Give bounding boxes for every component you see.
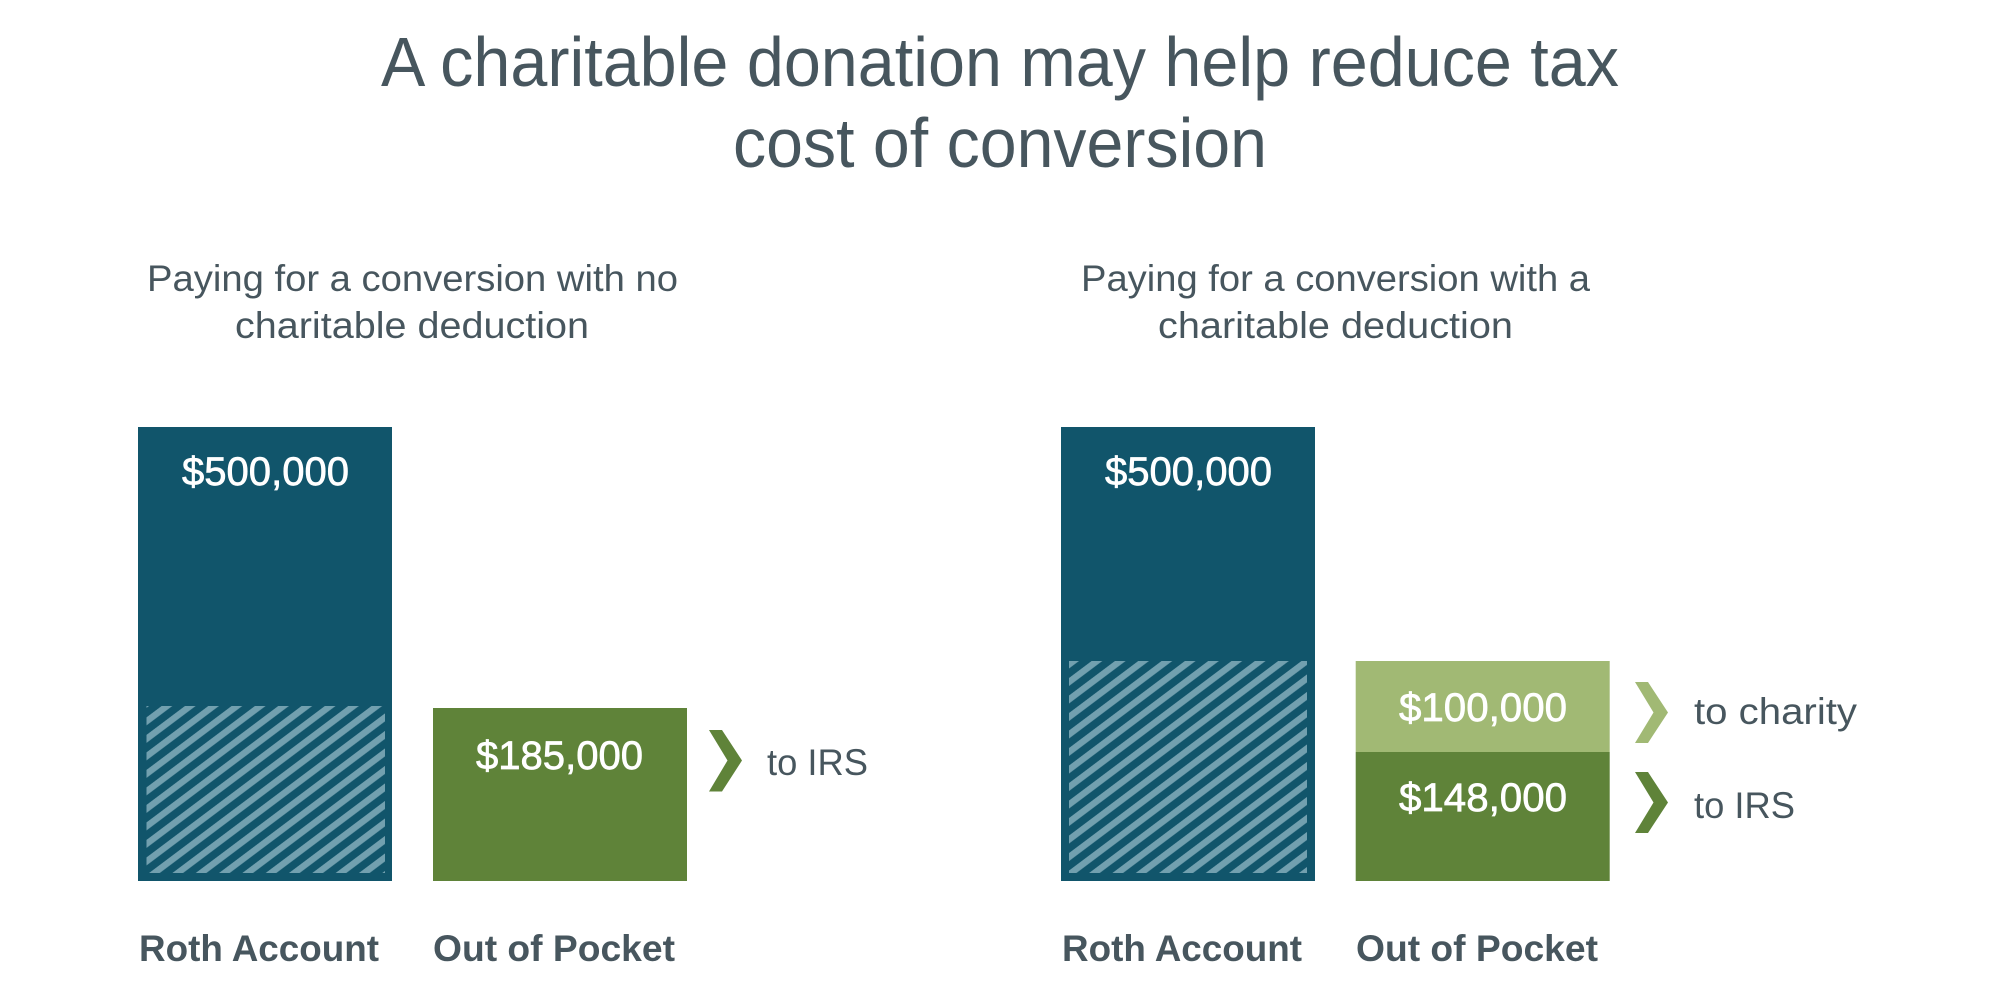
arrow: to IRS	[1635, 772, 1668, 833]
panel: with charitable deduction	[1061, 258, 1858, 969]
title: cost of conversion	[733, 104, 1267, 182]
axis label: Out of Pocket: Out of Pocket	[1356, 928, 1598, 969]
segment: to IRS: $148,000	[1399, 776, 1567, 820]
title	[381, 23, 1619, 182]
arrow: to IRS	[709, 730, 742, 792]
subheading: with deduction	[1081, 258, 1590, 346]
label: to charity: to charity	[1694, 691, 1858, 732]
subheading: no deduction: Paying for a conversion with no	[147, 258, 678, 299]
bar: Roth account: $500,000	[1105, 450, 1272, 494]
subheading: with deduction: Paying for a conversion with a	[1081, 258, 1590, 299]
bar: Roth account: $500,000	[182, 450, 349, 494]
axis label: Out of Pocket: Out of Pocket	[433, 928, 675, 969]
arrow: to charity	[1635, 682, 1668, 743]
subheading: no deduction	[147, 258, 678, 346]
bar: out of pocket stacked	[1356, 661, 1610, 881]
subheading: no deduction: charitable deduction	[235, 305, 589, 346]
segment: to charity: $100,000	[1399, 686, 1567, 730]
segment: to IRS	[1356, 752, 1610, 881]
bar: Roth account	[1061, 427, 1315, 881]
bar: Roth account	[138, 427, 392, 881]
title: A charitable donation may help reduce tax	[381, 23, 1619, 101]
bar: out of pocket: $185,000	[476, 734, 643, 778]
axis label: Roth Account: Roth Account	[1062, 928, 1302, 969]
segment: to charity	[1356, 661, 1610, 752]
label: to IRS: to IRS	[1694, 785, 1795, 826]
label: to IRS: to IRS	[767, 742, 868, 783]
axis label: Roth Account: Roth Account	[139, 928, 379, 969]
panel: no charitable deduction	[138, 258, 868, 969]
subheading: with deduction: charitable deduction	[1158, 305, 1513, 346]
bar: out of pocket	[433, 708, 687, 881]
